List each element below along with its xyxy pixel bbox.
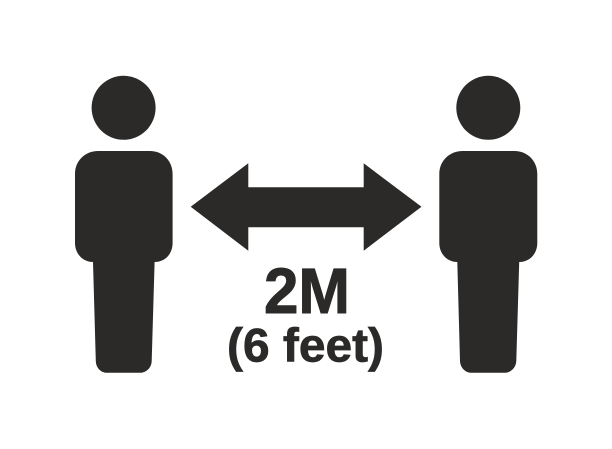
text: distance in feet: (6 feet): [227, 319, 384, 372]
left person body: [75, 151, 173, 373]
icon: double-headed arrow: [191, 163, 422, 251]
right person body: [439, 151, 537, 373]
heading: distance in metres: 2M: [264, 255, 350, 327]
icon: left person: [75, 76, 173, 373]
icon: right person: [439, 76, 537, 373]
right person head: [456, 76, 520, 140]
left person head: [92, 76, 156, 140]
